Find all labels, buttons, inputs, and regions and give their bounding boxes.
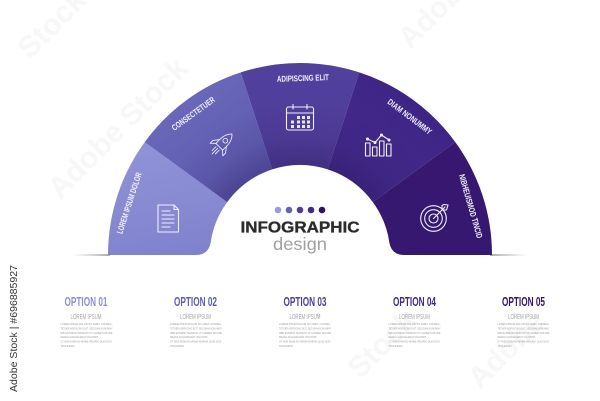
option 5: LOREM IPSUM — [508, 314, 539, 321]
option 5: NIBH EUISMOD TINCIDUNT UT LAOREET DOLORE — [498, 331, 550, 335]
option 2 — [170, 295, 222, 348]
segment 2 — [145, 72, 272, 202]
option 1: TETUER ADIPISCING ELIT, SED DIAM NONUMMY — [60, 326, 112, 330]
segment 3 — [241, 63, 359, 169]
option 1 — [60, 295, 112, 348]
option 4: UT WISI ENIM AD MINIM VENIAM, QUIS NOS- — [388, 340, 440, 344]
calendar days — [291, 116, 310, 128]
segment label 4: DIAM NONUMMY — [386, 97, 434, 137]
watermark: Adobe Stock — [42, 52, 195, 205]
option 5: LOREM IPSUM DOLOR SIT AMET, CONSEC- — [498, 322, 550, 326]
option 2: OPTION 02 — [174, 295, 217, 309]
icon: calendar — [286, 104, 314, 130]
option 1: NIBH EUISMOD TINCIDUNT UT LAOREET DOLORE — [60, 331, 112, 335]
option 4: TRUD EXERCI — [388, 344, 403, 348]
option 2: TETUER ADIPISCING ELIT, SED DIAM NONUMMY — [170, 326, 222, 330]
ground shadows — [72, 254, 528, 256]
semicircle chart — [108, 63, 492, 255]
option 1: LOREM IPSUM DOLOR SIT AMET, CONSEC- — [60, 322, 112, 326]
option 5: OPTION 05 — [502, 295, 545, 309]
center title block — [240, 207, 360, 254]
option 2: TRUD EXERCI — [170, 344, 184, 348]
option 4: TETUER ADIPISCING ELIT, SED DIAM NONUMMY — [388, 326, 440, 330]
option 1: TRUD EXERCI — [60, 344, 75, 348]
segment 5 — [373, 142, 492, 255]
option 5: TETUER ADIPISCING ELIT, SED DIAM NONUMMY — [498, 326, 550, 330]
segment 4 — [328, 72, 455, 202]
progress dots — [275, 207, 325, 213]
option 3: LOREM IPSUM DOLOR SIT AMET, CONSEC- — [279, 322, 331, 326]
option 5: UT WISI ENIM AD MINIM VENIAM, QUIS NOS- — [498, 340, 550, 344]
option 2: NIBH EUISMOD TINCIDUNT UT LAOREET DOLORE — [170, 331, 222, 335]
option 1: MAGNA ALIQUAM ERAT VOLUTPAT. — [60, 335, 99, 339]
segment label 1: LOREM IPSUM DOLOR — [115, 171, 144, 235]
option 3 — [279, 295, 331, 348]
option 4: OPTION 04 — [393, 295, 436, 309]
icon: rocket — [206, 128, 238, 160]
option 5: MAGNA ALIQUAM ERAT VOLUTPAT. — [498, 335, 536, 339]
segment label 3: ADIPISCING ELIT — [277, 72, 330, 84]
option 4: LOREM IPSUM — [399, 314, 430, 321]
option 1: OPTION 01 — [64, 295, 108, 309]
option 3: TRUD EXERCI — [279, 344, 293, 348]
option 3: TETUER ADIPISCING ELIT, SED DIAM NONUMMY — [279, 326, 331, 330]
option 4: NIBH EUISMOD TINCIDUNT UT LAOREET DOLORE — [388, 331, 440, 335]
icon: document — [158, 205, 178, 232]
option 5: TRUD EXERCI — [498, 344, 512, 348]
option 3: NIBH EUISMOD TINCIDUNT UT LAOREET DOLORE — [279, 331, 331, 335]
option 1: LOREM IPSUM — [70, 314, 102, 321]
stock credit: Adobe Stock | #696885927 — [8, 265, 20, 392]
subtitle: design — [273, 234, 327, 254]
inner shading — [145, 63, 455, 202]
segment label 5: NIBHEUISMOD TINCID — [457, 173, 485, 239]
option 2: UT WISI ENIM AD MINIM VENIAM, QUIS NOS- — [170, 340, 222, 344]
option 3: MAGNA ALIQUAM ERAT VOLUTPAT. — [279, 335, 317, 339]
segment 1 — [108, 142, 227, 255]
option 2: MAGNA ALIQUAM ERAT VOLUTPAT. — [170, 335, 208, 339]
title: INFOGRAPHIC — [240, 220, 360, 236]
option 3: OPTION 03 — [284, 295, 327, 309]
option 1: UT WISI ENIM AD MINIM VENIAM, QUIS NOS- — [60, 340, 112, 344]
option 3: UT WISI ENIM AD MINIM VENIAM, QUIS NOS- — [279, 340, 331, 344]
option 4: LOREM IPSUM DOLOR SIT AMET, CONSEC- — [388, 322, 440, 326]
icon: bar chart — [366, 134, 391, 156]
icon: target — [421, 204, 448, 231]
option 4: MAGNA ALIQUAM ERAT VOLUTPAT. — [388, 335, 427, 339]
option 2: LOREM IPSUM DOLOR SIT AMET, CONSEC- — [170, 322, 222, 326]
watermark: Adobe — [462, 306, 551, 395]
segment label 2: CONSECTETUER — [170, 95, 217, 133]
watermark: Stock — [342, 304, 423, 385]
option 5 — [498, 295, 550, 348]
option 3: LOREM IPSUM — [290, 314, 321, 321]
option 4 — [388, 295, 440, 348]
option 2: LOREM IPSUM — [180, 314, 211, 321]
